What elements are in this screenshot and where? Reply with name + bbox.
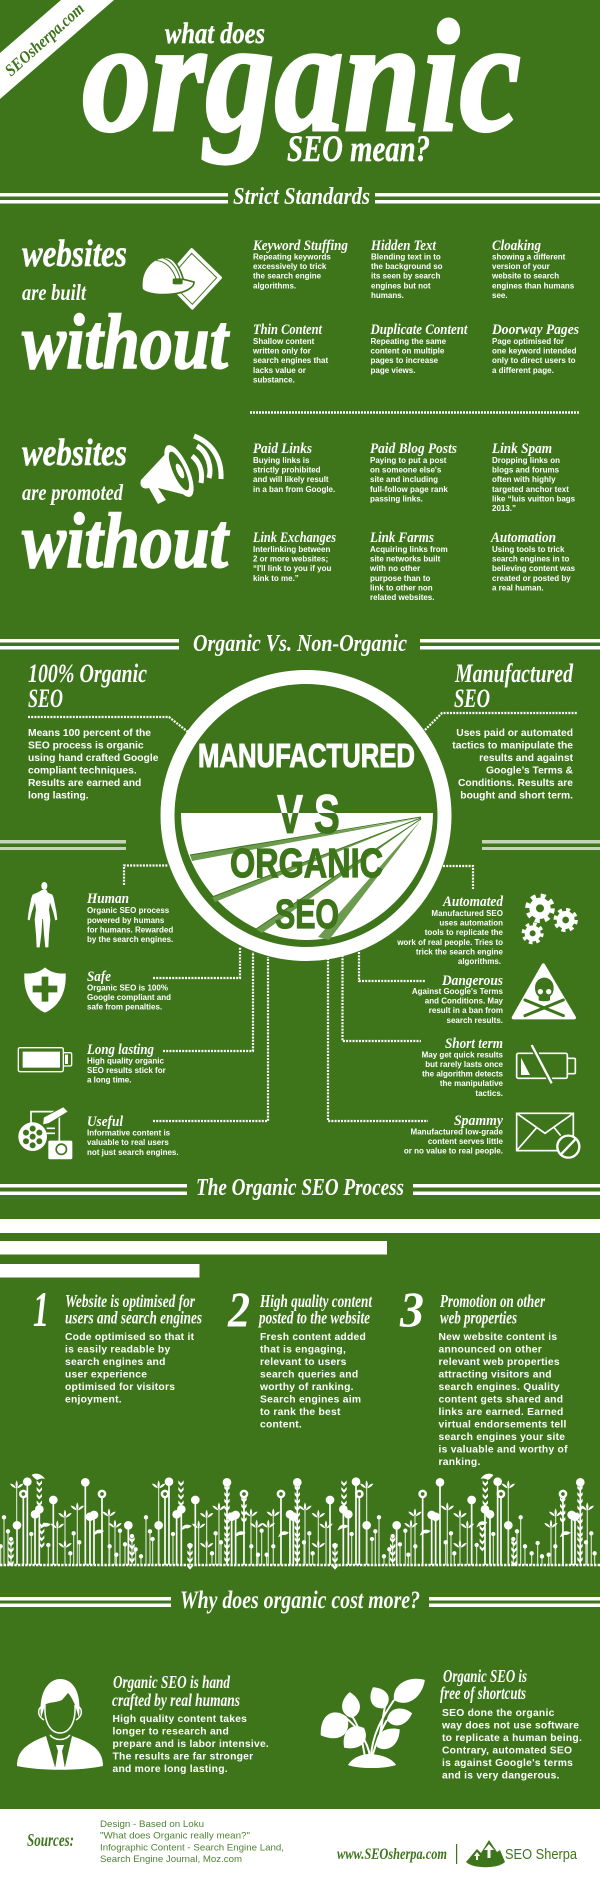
flowers right half	[298, 1474, 595, 1570]
sources	[27, 1819, 284, 1865]
item: Safe: Safe	[87, 969, 111, 985]
item: Safe	[24, 967, 171, 1013]
item: Link Farms: with no other	[369, 564, 420, 573]
item: Automation: created or posted by	[492, 574, 571, 583]
panel: manufactured SEO: results and against	[479, 753, 574, 764]
title: what does	[165, 17, 265, 50]
item: Paid Links	[253, 441, 335, 494]
badge: manufactured vs organic: SEO	[275, 891, 339, 937]
illustration: meadow of flowers	[0, 1474, 600, 1570]
step 2: to rank the best	[260, 1407, 341, 1418]
icon: empty battery	[517, 1045, 575, 1083]
step 3: Promotion on other	[439, 1291, 546, 1311]
item: Safe: Google compliant and	[87, 993, 171, 1002]
item: Automated: uses automation	[439, 919, 503, 928]
step 2: posted to the website	[258, 1308, 370, 1328]
item: Short term: May get quick results	[422, 1050, 504, 1060]
item: Hidden Text: the background so	[371, 262, 443, 271]
icon: hard hat and sign	[142, 249, 221, 308]
panel: 100% organic SEO: SEO process is organic	[28, 740, 144, 752]
item: Long lasting	[18, 1042, 166, 1085]
icon: envelope with no sign	[517, 1113, 579, 1158]
item: Link Spam: blogs and forums	[492, 466, 560, 475]
item: Paid Links: in a ban from Google.	[253, 485, 335, 494]
item: Paid Blog Posts	[370, 441, 457, 503]
item: Safe: Organic SEO is 100%	[87, 984, 168, 992]
step 1: user experience	[65, 1370, 147, 1380]
item: Automation: believing content was	[492, 564, 576, 573]
rays	[190, 818, 421, 940]
item: Short term: the algorithm detects	[422, 1070, 504, 1079]
panel: 100% organic SEO: 100% Organic	[28, 659, 147, 688]
section heading: Strict Standards: Strict Standards	[233, 184, 370, 210]
panel: free of shortcuts: and is very dangerous.	[442, 1770, 560, 1782]
icon: gears	[523, 896, 576, 943]
item: Automation: Automation	[490, 530, 556, 546]
item: Link Farms: Link Farms	[369, 530, 434, 546]
item: Hidden Text: humans.	[371, 291, 404, 300]
panel: manufactured SEO: bought and short term.	[460, 790, 573, 802]
step 3: virtual endorsements tell	[438, 1420, 567, 1430]
panel: free of shortcuts: free of shortcuts	[440, 1683, 526, 1703]
item: Duplicate Content: content on multiple	[370, 347, 445, 356]
item: Doorway Pages	[491, 322, 579, 375]
step 1: Code optimised so that it	[65, 1332, 195, 1343]
side stripes	[0, 840, 600, 850]
icon: skull warning triangle	[513, 965, 574, 1018]
item: Hidden Text	[370, 238, 443, 300]
item: Long lasting: a long time.	[87, 1076, 131, 1085]
item: Short term	[422, 1036, 575, 1098]
item: Dangerous: search results.	[447, 1016, 503, 1025]
list: promoted without	[252, 441, 576, 602]
item: Doorway Pages: one keyword intended	[492, 347, 577, 356]
item: Keyword Stuffing: algorithms.	[253, 281, 296, 290]
panel: manufactured SEO: tactics to manipulate the	[452, 740, 573, 752]
sources: Infographic Content - Search Engine Land,	[100, 1842, 284, 1854]
website: www.SEOsherpa.com	[337, 1846, 447, 1863]
step 3: content gets shared and	[438, 1394, 563, 1406]
section heading: Why does organic cost more?	[0, 1587, 600, 1614]
item: Duplicate Content	[370, 322, 468, 375]
item: Automated: Automated	[442, 894, 503, 910]
panel: websites are promoted without: without	[22, 497, 230, 584]
step 2: that is engaging,	[260, 1344, 346, 1356]
panel: hand crafted by real humans: prepare and is labor intensive.	[112, 1739, 269, 1750]
item: Paid Blog Posts: on someone else's	[370, 466, 442, 475]
panel: free of shortcuts: to replicate a human being.	[442, 1733, 582, 1744]
item: Automated: algorithms.	[458, 957, 501, 966]
item: Thin Content: written only for	[252, 347, 311, 356]
section heading: Organic Vs. Non-Organic	[0, 631, 600, 657]
item: Human: powered by humans	[87, 916, 165, 925]
item: Hidden Text: engines but not	[371, 281, 431, 290]
divider	[456, 1844, 457, 1864]
step 1: search engines and	[65, 1357, 166, 1368]
badge: manufactured vs organic: V S	[277, 783, 340, 845]
item: Keyword Stuffing: excessively to trick	[253, 262, 327, 271]
panel: hand crafted by real humans: crafted by real humans	[112, 1690, 240, 1710]
panel: hand crafted by real humans: longer to research and	[112, 1726, 229, 1738]
step 3	[399, 1281, 568, 1468]
logo: SEO Sherpa	[466, 1840, 578, 1867]
item: Thin Content: Thin Content	[253, 322, 323, 338]
item: Dangerous	[412, 965, 574, 1025]
sources: "What does Organic really mean?"	[100, 1830, 250, 1842]
item: Link Exchanges	[252, 530, 336, 583]
panel: hand crafted by real humans: The results are far stronger	[112, 1752, 253, 1762]
item: Link Exchanges: 2 or more websites;	[253, 555, 328, 564]
panel: manufactured SEO: Google’s Terms &	[486, 766, 574, 776]
item: Link Spam: Dropping links on	[492, 456, 560, 465]
step 3: 3	[399, 1281, 424, 1337]
item: Link Farms: site networks built	[370, 555, 441, 564]
item: Useful: Useful	[87, 1114, 124, 1130]
panel: manufactured SEO: SEO	[454, 684, 490, 713]
icon: man in suit	[17, 1679, 103, 1770]
item: Link Spam	[491, 441, 576, 513]
item: Automation: Using tools to trick	[492, 545, 565, 554]
item: Spammy: Spammy	[454, 1113, 503, 1129]
item: Spammy: or no value to real people.	[404, 1147, 503, 1156]
item: Keyword Stuffing	[252, 238, 348, 290]
icon: film reel, paper and camera	[18, 1107, 72, 1159]
step 2: content.	[260, 1420, 302, 1430]
item: Useful: Informative content is	[87, 1129, 171, 1138]
badge: manufactured vs organic: ORGANIC	[230, 840, 383, 886]
item: Paid Links: Paid Links	[253, 441, 312, 457]
panel: hand crafted by real humans	[17, 1672, 269, 1775]
item: Useful	[18, 1107, 179, 1159]
icon: full battery	[18, 1048, 72, 1072]
section heading: The Organic SEO Process: The Organic SEO Process	[196, 1175, 404, 1201]
item: Link Farms: link to other non	[370, 583, 433, 592]
item: Long lasting: Long lasting	[86, 1042, 154, 1058]
icon: shield	[24, 967, 66, 1013]
panel: manufactured SEO: Uses paid or automated	[456, 728, 573, 739]
item: Dangerous: and Conditions. May	[425, 997, 504, 1006]
sources: Sources:	[27, 1830, 74, 1850]
step 3: relevant web properties	[438, 1357, 560, 1368]
item: Keyword Stuffing: the search engine	[253, 272, 322, 281]
panel: free of shortcuts: way does not use software	[441, 1720, 579, 1732]
item: Safe: safe from penalties.	[87, 1003, 162, 1012]
step 3: announced on other	[438, 1344, 542, 1356]
item: Dangerous: Against Google's Terms	[412, 987, 504, 996]
panel: hand crafted by real humans: High quality content takes	[112, 1714, 247, 1725]
step 3: is valuable and worthy of	[438, 1444, 568, 1456]
icon: plant	[313, 1671, 430, 1768]
item: Doorway Pages: Page optimised for	[492, 337, 564, 346]
panel: 100% organic SEO: long lasting.	[28, 790, 89, 802]
panel: 100% organic SEO	[28, 659, 188, 802]
panel: websites are promoted without	[22, 432, 230, 584]
item: Link Farms	[369, 530, 448, 602]
item: Link Spam: Link Spam	[491, 441, 552, 457]
item: Automation: a real human.	[492, 583, 544, 592]
step 2: High quality content	[259, 1291, 373, 1311]
item: Dangerous: Dangerous	[441, 973, 503, 989]
panel: 100% organic SEO: SEO	[28, 684, 63, 713]
item: Human: Organic SEO process	[87, 906, 170, 915]
item: Link Spam: targeted anchor text	[492, 485, 569, 494]
item: Human: for humans. Rewarded	[87, 926, 173, 935]
item: Automated	[396, 894, 576, 966]
panel: websites are built without: without	[22, 298, 230, 385]
step 2: search queries and	[260, 1370, 358, 1380]
item: Paid Blog Posts: site and including	[370, 475, 438, 484]
item: Long lasting: High quality organic	[87, 1056, 164, 1066]
step 2: 2	[227, 1281, 250, 1337]
step 3: New website content is	[438, 1332, 557, 1343]
item: Short term: tactics.	[475, 1089, 503, 1098]
title: SEO mean?	[287, 129, 430, 170]
step 3: links are earned. Earned	[438, 1407, 564, 1418]
item: Hidden Text: Hidden Text	[370, 238, 437, 254]
step 3: search engines your site	[438, 1432, 565, 1443]
badge: manufactured vs organic	[168, 677, 444, 954]
step 1: 1	[33, 1281, 49, 1337]
item: Link Farms: Acquiring links from	[370, 545, 448, 554]
item: Link Exchanges: Link Exchanges	[252, 530, 336, 546]
item: Link Farms: purpose than to	[370, 574, 431, 583]
item: Paid Blog Posts: full-follow page rank	[370, 485, 448, 494]
dotted connectors	[124, 866, 473, 1121]
dotted divider	[250, 411, 580, 414]
logo: SEO Sherpa: SEO Sherpa	[505, 1846, 578, 1863]
item: Short term: but rarely lasts once	[425, 1060, 504, 1069]
sources: Design - Based on Loku	[100, 1819, 204, 1830]
item: Paid Links: strictly prohibited	[253, 466, 321, 475]
panel: websites are built without: are built	[22, 280, 86, 305]
panel: websites are promoted without: websites	[22, 432, 127, 474]
item: Link Exchanges: kink to me.”	[253, 574, 299, 583]
step 3: web properties	[440, 1308, 517, 1328]
badge: manufactured vs organic: MANUFACTURED	[198, 737, 415, 774]
item: Keyword Stuffing: Repeating keywords	[253, 252, 331, 262]
panel: free of shortcuts	[313, 1666, 582, 1782]
item: Thin Content: lacks value or	[253, 366, 306, 375]
item: Useful: not just search engines.	[87, 1148, 179, 1157]
item: Thin Content: search engines that	[253, 356, 328, 365]
icon: megaphone	[140, 436, 221, 504]
item: Link Spam: 2013.”	[492, 504, 516, 513]
item: Thin Content: Shallow content	[253, 337, 315, 346]
item: Doorway Pages: a different page.	[492, 366, 554, 375]
step 1: optimised for visitors	[65, 1382, 175, 1393]
item: Cloaking: website to search	[491, 272, 559, 281]
item: Short term: the manipulative	[440, 1079, 504, 1088]
item: Automated: Manufactured SEO	[431, 909, 503, 918]
item: Automation	[490, 530, 576, 592]
item: Duplicate Content: pages to increase	[370, 356, 439, 365]
item: Spammy	[404, 1113, 579, 1158]
item: Link Exchanges: Interlinking between	[253, 545, 330, 554]
panel: 100% organic SEO: compliant techniques.	[28, 766, 137, 776]
step 2	[227, 1281, 373, 1430]
item: Automated: trick the search engine	[416, 947, 504, 956]
item: Cloaking: see.	[492, 291, 508, 300]
panel: 100% organic SEO: Means 100 percent of the	[28, 728, 151, 739]
item: Paid Blog Posts: Paying to put a post	[370, 456, 447, 465]
panel: manufactured SEO: Conditions. Results are	[458, 778, 573, 789]
step 3: attracting visitors and	[438, 1370, 552, 1380]
item: Dangerous: result in a ban from	[429, 1006, 503, 1015]
item: Automated: work of real people. Tries to	[396, 938, 503, 947]
item: Spammy: content serves little	[428, 1137, 504, 1146]
step 2: relevant to users	[260, 1357, 347, 1368]
item: Duplicate Content: Duplicate Content	[370, 322, 468, 338]
section heading: Organic Vs. Non-Organic: Organic Vs. Non-Organic	[193, 631, 407, 657]
step 1: enjoyment.	[65, 1394, 122, 1406]
icon: human figure	[28, 882, 57, 947]
step 1: users and search engines	[65, 1308, 202, 1328]
list: built without	[252, 238, 579, 384]
step 1	[33, 1281, 202, 1406]
item: Paid Blog Posts: Paid Blog Posts	[370, 441, 457, 457]
item: Duplicate Content: page views.	[370, 366, 415, 375]
item: Keyword Stuffing: Keyword Stuffing	[252, 238, 348, 254]
item: Human: by the search engines.	[87, 935, 173, 944]
item: Automated: tools to replicate the	[425, 928, 504, 937]
footer	[0, 1809, 600, 1878]
item: Human: Human	[86, 891, 129, 907]
item: Long lasting: SEO results stick for	[87, 1066, 166, 1075]
panel: free of shortcuts: Organic SEO is	[443, 1666, 527, 1686]
panel: hand crafted by real humans: and more long lasting.	[112, 1764, 228, 1775]
step 3: search engines. Quality	[438, 1382, 560, 1393]
panel: 100% organic SEO: using hand crafted Google	[28, 753, 159, 764]
item: Thin Content	[252, 322, 328, 384]
step 1: is easily readable by	[65, 1344, 170, 1356]
item: Link Exchanges: “I'll link to you if you	[253, 564, 331, 573]
item: Paid Links: and will likely result	[253, 475, 329, 484]
ground line	[0, 1564, 600, 1566]
step 1: Website is optimised for	[65, 1291, 196, 1311]
item: Link Spam: like “luis vuitton bags	[492, 494, 576, 503]
item: Cloaking: version of your	[492, 262, 550, 271]
item: Cloaking: Cloaking	[492, 238, 541, 254]
panel: 100% organic SEO: Results are earned and	[28, 778, 141, 789]
progress bars	[0, 1219, 600, 1278]
item: Spammy: Manufactured low-grade	[411, 1128, 504, 1136]
section heading: Strict Standards	[0, 184, 600, 210]
item: Cloaking: showing a different	[492, 252, 566, 262]
item: Doorway Pages: only to direct users to	[492, 356, 576, 365]
item: Doorway Pages: Doorway Pages	[491, 322, 579, 338]
sources: Search Engine Journal, Moz.com	[100, 1854, 242, 1865]
item: Link Spam: often with highly	[492, 475, 556, 484]
panel: manufactured SEO	[425, 659, 577, 802]
section heading: Why does organic cost more?: Why does organic cost more?	[180, 1587, 420, 1614]
panel: hand crafted by real humans: Organic SEO is hand	[113, 1672, 231, 1692]
item: Automation: search engines in to	[492, 555, 569, 564]
item: Human	[28, 882, 173, 947]
flowers left half	[1, 1474, 300, 1570]
panel: free of shortcuts: is against Google's terms	[442, 1758, 573, 1769]
step 2: Search engines aim	[260, 1394, 361, 1406]
step 2: Fresh content added	[260, 1332, 366, 1343]
item: Paid Blog Posts: passing links.	[370, 494, 423, 503]
item: Short term: Short term	[445, 1036, 503, 1052]
item: Paid Links: Buying links is	[253, 456, 310, 465]
section heading: The Organic SEO Process	[0, 1175, 600, 1201]
item: Cloaking	[491, 238, 575, 300]
item: Hidden Text: its seen by search	[371, 272, 440, 281]
item: Duplicate Content: Repeating the same	[370, 337, 447, 346]
panel: free of shortcuts: Contrary, automated SEO	[442, 1746, 572, 1756]
item: Link Farms: related websites.	[370, 593, 434, 602]
step 2: worthy of ranking.	[259, 1382, 354, 1393]
panel: websites are promoted without: are promoted	[22, 480, 123, 505]
item: Hidden Text: Blending text in to	[371, 252, 441, 262]
item: Thin Content: substance.	[253, 375, 295, 384]
item: Cloaking: engines than humans	[492, 281, 575, 290]
panel: websites are built without	[22, 233, 230, 385]
item: Useful: valuable to real users	[87, 1138, 169, 1147]
panel: free of shortcuts: SEO done the organic	[442, 1708, 555, 1719]
corner ribbon	[0, 0, 114, 99]
step 3: ranking.	[438, 1457, 481, 1468]
panel: websites are built without: websites	[22, 233, 127, 275]
